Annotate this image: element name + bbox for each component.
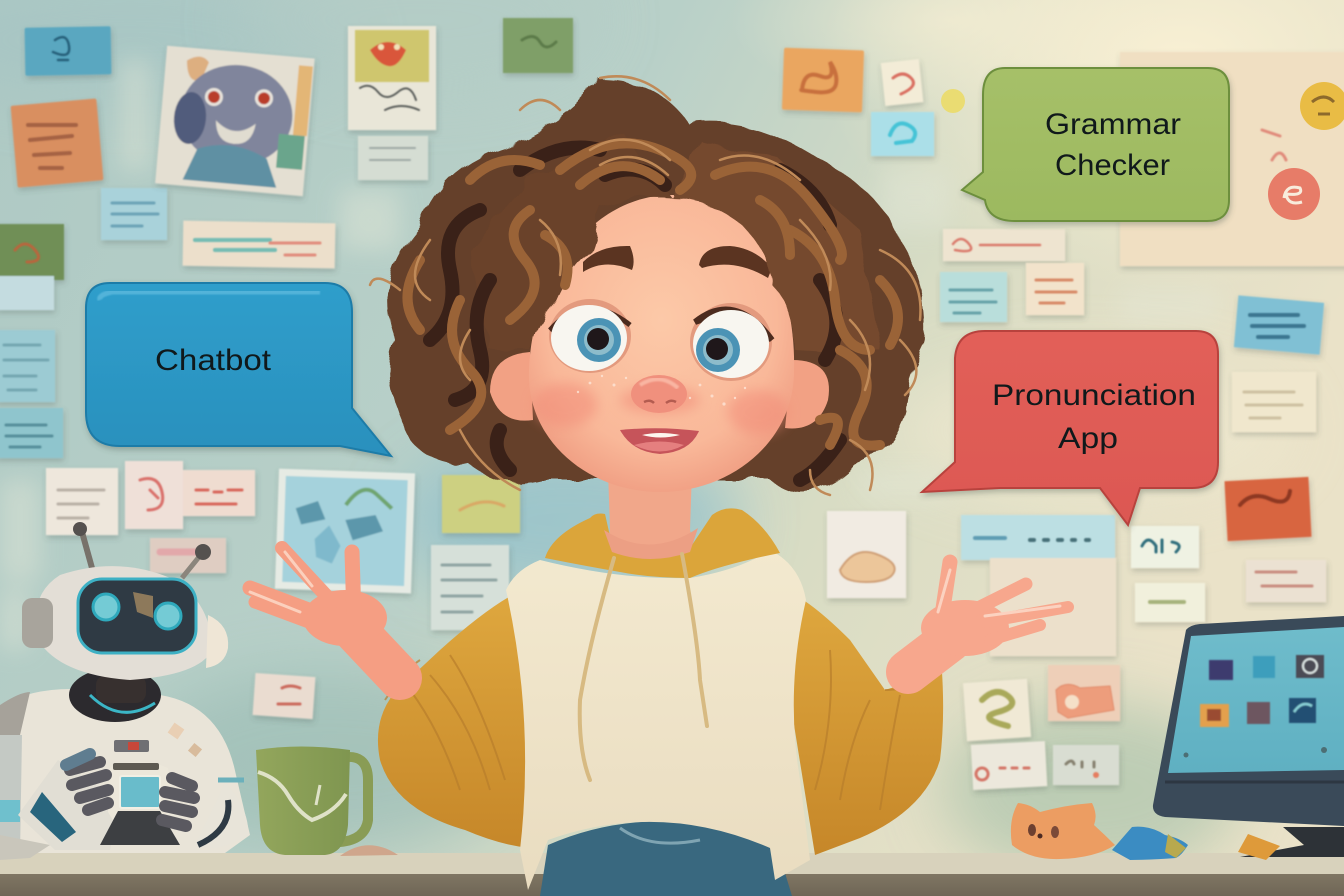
robot: [0, 522, 250, 860]
table: [0, 853, 1344, 896]
left eye: [549, 299, 631, 373]
left hand: [250, 548, 400, 678]
screen: [1168, 627, 1344, 773]
controller: [100, 762, 180, 845]
robot body: [0, 689, 250, 860]
front hair: [370, 76, 920, 495]
ghost paper patches: [0, 60, 1220, 650]
right hand: [908, 562, 1068, 672]
antennae: [73, 522, 211, 578]
visor eyes: [93, 594, 181, 629]
mug: [256, 746, 398, 856]
label: Grammar Checker: [1045, 108, 1181, 182]
label: Pronunciation App: App: [1058, 422, 1118, 455]
neck opening: [604, 528, 698, 559]
chest panel: [114, 740, 149, 752]
wall notes: right side: [782, 48, 1344, 790]
large paper: [1120, 52, 1344, 266]
orange piece: [1238, 834, 1280, 860]
right sleeve: [785, 590, 943, 855]
note doodles: [801, 62, 1312, 780]
note doodles: left side: [4, 36, 556, 704]
visor: [78, 579, 196, 653]
robot hands: [66, 754, 194, 826]
note shapes: [782, 48, 1326, 790]
hood: [545, 508, 780, 578]
robot head: [22, 566, 228, 680]
freckles: [577, 375, 746, 406]
small yellow sticker: [941, 89, 965, 113]
blue cloth: [1112, 827, 1188, 860]
app icons: [1200, 655, 1324, 727]
jeans: [540, 821, 792, 896]
speech bubble: pronunciation app: [922, 331, 1218, 525]
picture note: grey creature: [155, 46, 315, 196]
label: Pronunciation App: [992, 379, 1196, 455]
red round sticker: [1268, 168, 1320, 220]
back hair: [387, 80, 926, 492]
label: Grammar Checker: Checker: [1055, 149, 1170, 182]
right eyebrow: [699, 246, 772, 278]
monitor: [1153, 616, 1344, 857]
nose: [631, 375, 687, 413]
hoodie body: [506, 550, 810, 890]
speech bubble: chatbot: [86, 283, 391, 456]
wall notes: left side: [0, 18, 573, 719]
desk toys: [1011, 803, 1280, 860]
robot arms: [0, 760, 248, 860]
character: [250, 76, 1068, 896]
ears: [490, 352, 829, 428]
speech bubble: grammar checker: [962, 68, 1229, 221]
cheeks: [533, 383, 788, 434]
label: Pronunciation App: Pronunciation: [992, 379, 1196, 412]
left eyebrow: [583, 246, 634, 272]
orange cat toy: [1011, 803, 1115, 859]
hair curls: [370, 76, 920, 495]
picture note: red face: [355, 30, 429, 82]
sleeve ribbing: [385, 650, 940, 810]
stand: [1240, 827, 1344, 857]
neck: [608, 470, 692, 556]
yellow sticker: [1300, 82, 1344, 130]
face: [529, 195, 794, 492]
picture note: blue scene: [275, 469, 415, 593]
label: Grammar Checker: Grammar: [1045, 108, 1181, 141]
label: Chatbot: Chatbot: [155, 344, 272, 377]
left sleeve: [378, 590, 530, 848]
right eye: [690, 303, 772, 381]
robot neck: [69, 668, 161, 722]
drawstrings: [580, 554, 707, 780]
mouth: [620, 428, 699, 454]
